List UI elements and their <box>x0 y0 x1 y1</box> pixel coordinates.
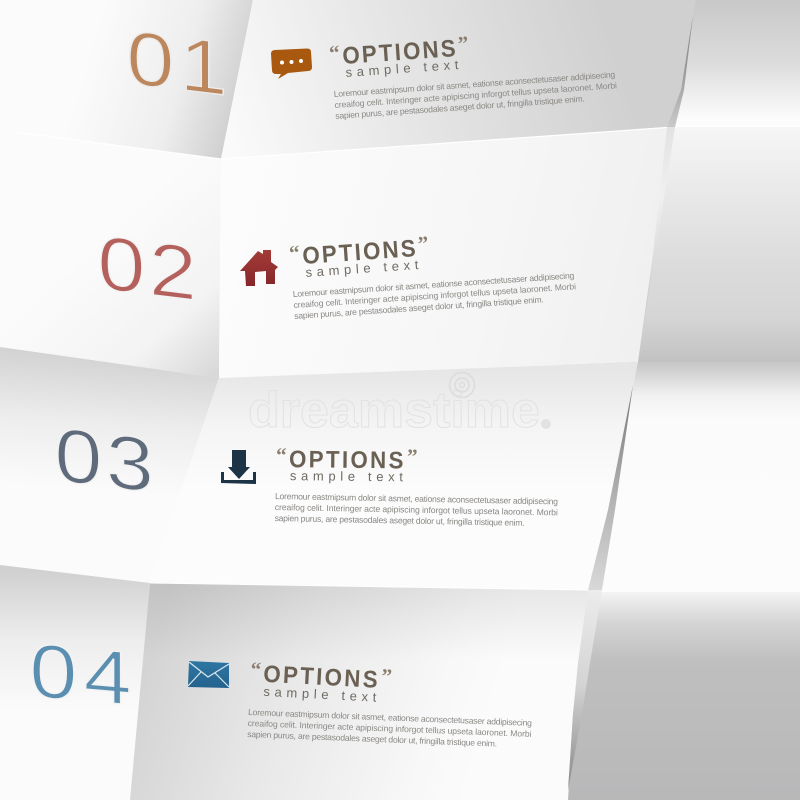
icon: house <box>240 250 278 286</box>
body text: sapien purus, are pestasodales aseget dolor ut, fringilla tristique enim. <box>275 513 525 528</box>
heading: sample text <box>290 468 403 484</box>
heading <box>276 443 418 484</box>
body text: creaifog celit. Interinger acte apipiscing inforgot tellus upseta laoronet. Morbi <box>334 80 617 110</box>
background: metallic right bands <box>560 0 800 800</box>
body text <box>275 491 558 528</box>
icon: download <box>221 450 256 484</box>
heading <box>328 31 470 81</box>
heading: “ <box>328 40 340 65</box>
body text: Loremour eastmipsum dolor sit asmet, eationse aconsectetusaser addipisecing <box>333 69 616 99</box>
body text: creaifog celit. Interinger acte apipiscing inforgot tellus upseta laoronet. Morbi <box>248 718 532 739</box>
heading: sample text <box>345 57 459 80</box>
body text: Loremour eastmipsum dolor sit asmet, eationse aconsectetusaser addipisecing <box>275 491 558 506</box>
heading <box>249 657 393 705</box>
option 4 <box>188 657 532 750</box>
body text <box>247 707 532 750</box>
body text: Loremour eastmipsum dolor sit asmet, eationse aconsectetusaser addipisecing <box>292 270 575 299</box>
heading: ” <box>417 231 429 256</box>
heading: “ <box>250 657 262 682</box>
icon: speech bubble <box>271 48 312 79</box>
number 04: 04 <box>30 628 131 722</box>
number 02: 02 <box>98 220 197 317</box>
body text: sapien purus, are pestasodales aseget dolor ut, fringilla tristique enim. <box>294 294 544 321</box>
option 2 <box>240 231 577 321</box>
heading: OPTIONS <box>289 445 404 474</box>
body text <box>333 69 618 121</box>
heading: ” <box>381 664 393 688</box>
body text: Loremour eastmipsum dolor sit asmet, eationse aconsectetusaser addipisecing <box>248 707 532 728</box>
heading: OPTIONS <box>301 234 417 269</box>
heading: ” <box>457 31 469 56</box>
body text: sapien purus, are pestasodales aseget dolor ut, fringilla tristique enim. <box>335 94 585 121</box>
option 3 <box>221 443 558 528</box>
heading: OPTIONS <box>263 660 378 693</box>
heading: sample text <box>305 257 419 280</box>
body text: creaifog celit. Interinger acte apipiscing inforgot tellus upseta laoronet. Morbi <box>275 502 558 517</box>
heading: “ <box>288 240 300 265</box>
heading: OPTIONS <box>341 34 457 69</box>
body text: creaifog celit. Interinger acte apipiscing inforgot tellus upseta laoronet. Morbi <box>293 281 576 310</box>
heading: “ <box>276 443 287 467</box>
icon: envelope <box>188 661 229 688</box>
number 01: 01 <box>126 15 227 112</box>
body text: sapien purus, are pestasodales aseget dolor ut, fringilla tristique enim. <box>247 729 497 749</box>
heading: sample text <box>263 684 377 705</box>
body text <box>292 270 577 321</box>
option 1 <box>271 31 618 121</box>
heading: ” <box>407 444 418 468</box>
number 03: 03 <box>54 412 154 509</box>
watermark: dreamstime <box>248 382 540 438</box>
heading <box>288 231 430 281</box>
